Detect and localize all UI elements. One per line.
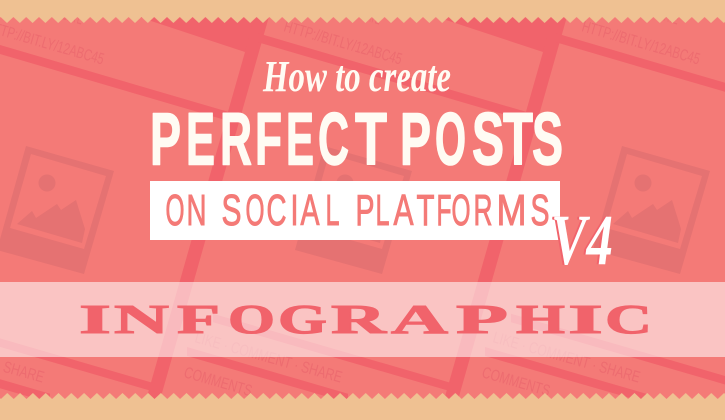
subtitle text: A (394, 186, 414, 235)
heading: perfect posts: P (400, 98, 431, 180)
subtitle text: I (290, 186, 298, 235)
subtitle text: O (452, 186, 470, 235)
band: infographic strip (0, 282, 725, 357)
band label: infographic: H (516, 296, 565, 342)
band label: infographic: R (331, 296, 387, 342)
heading: how to create: How to create (262, 52, 451, 101)
subtitle text: S (222, 186, 242, 235)
subtitle text: R (474, 186, 492, 235)
heading: perfect posts: C (318, 98, 349, 180)
heading: perfect posts: E (286, 98, 314, 180)
band label: infographic: A (391, 296, 449, 342)
subtitle text (166, 186, 550, 235)
heading: perfect posts: O (435, 98, 466, 180)
band label: infographic: I (568, 296, 603, 342)
heading: perfect posts: S (472, 98, 504, 180)
version mark: V4 (549, 200, 611, 280)
subtitle text: M (496, 186, 526, 235)
subtitle text: P (356, 186, 374, 235)
subtitle box (150, 181, 560, 240)
band label: infographic: P (456, 296, 508, 342)
band label: infographic: C (605, 296, 652, 342)
subtitle text: T (416, 186, 434, 235)
subtitle text: C (266, 186, 286, 235)
subtitle text: L (376, 186, 390, 235)
band label: infographic: I (79, 296, 111, 342)
heading: perfect posts: R (220, 98, 252, 180)
bottom serrated edge (0, 390, 725, 420)
band label: infographic: F (177, 296, 220, 342)
top serrated edge (0, 0, 725, 30)
subtitle text: F (436, 186, 452, 235)
subtitle text: O (246, 186, 264, 235)
subtitle text: S (530, 186, 550, 235)
subtitle text: N (186, 186, 206, 235)
band label: infographic: N (114, 296, 170, 342)
subtitle text: L (326, 186, 340, 235)
band label: infographic: G (278, 296, 327, 342)
band label: infographic: O (228, 296, 275, 342)
subtitle text: A (300, 186, 320, 235)
heading: perfect posts: S (532, 98, 563, 180)
heading: perfect posts: E (186, 98, 215, 180)
version mark: V4 (551, 200, 613, 280)
heading: perfect posts: F (255, 98, 282, 180)
heading: perfect posts: T (355, 98, 387, 180)
band label: infographic (79, 296, 652, 342)
heading: perfect posts: T (503, 98, 533, 180)
heading: perfect posts: P (150, 98, 181, 180)
subtitle text: O (166, 186, 184, 235)
heading: perfect posts (150, 98, 563, 180)
